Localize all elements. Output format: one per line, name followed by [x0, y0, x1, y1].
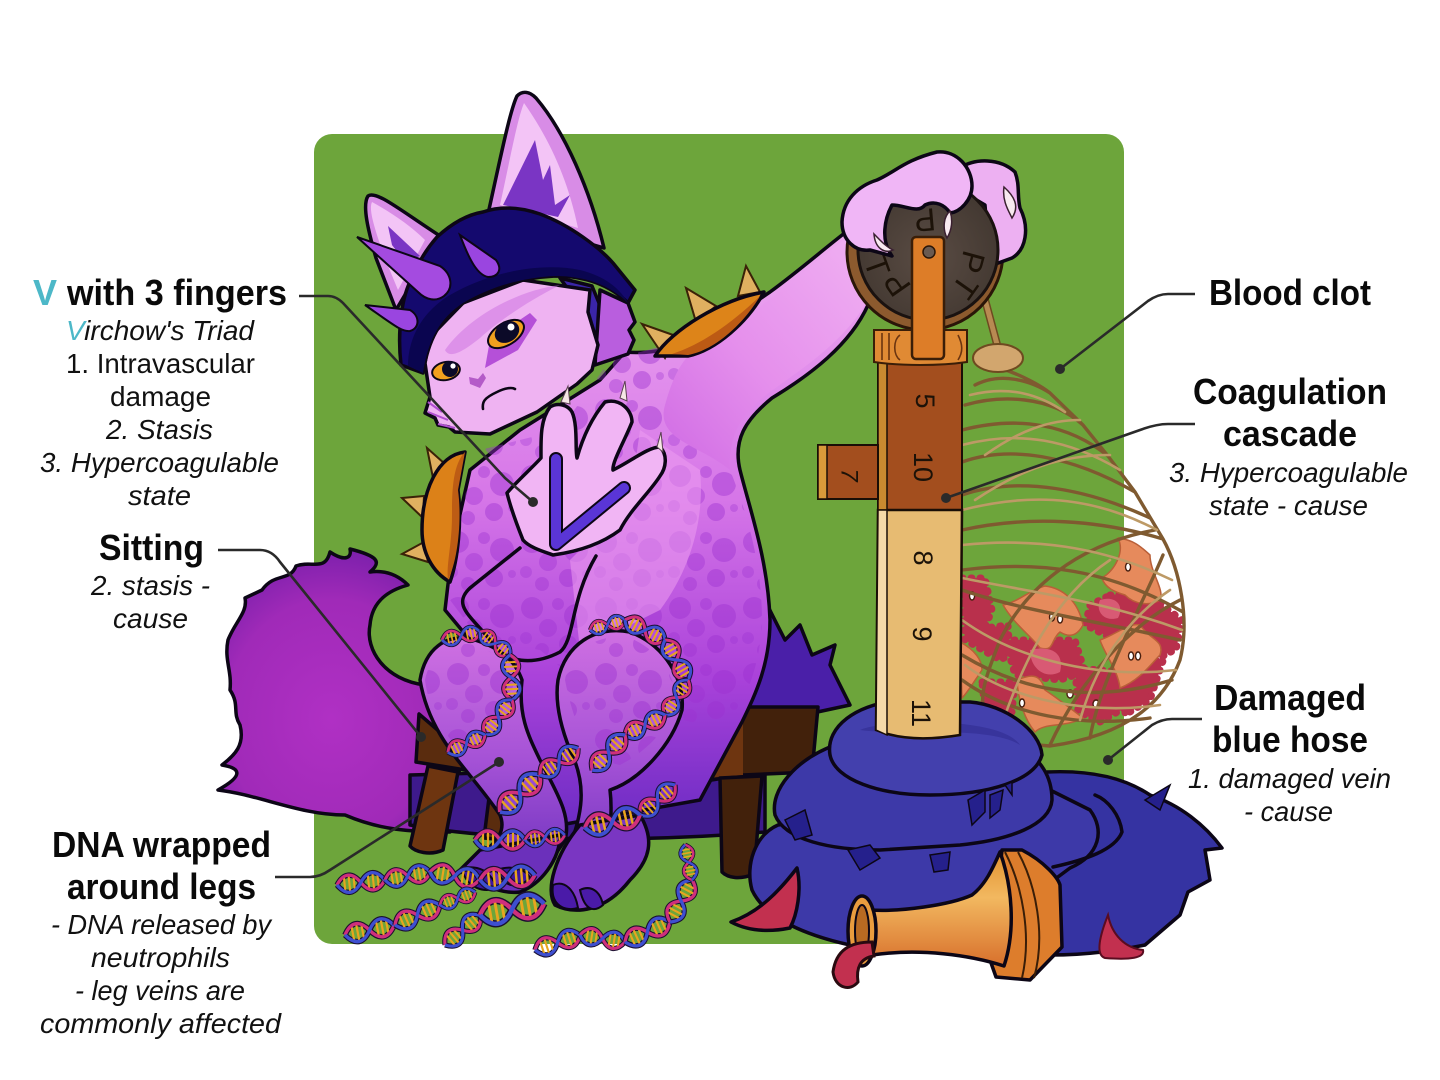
leader line: DNA	[275, 757, 504, 877]
leader line: blood clot	[1055, 294, 1195, 374]
right leg	[557, 631, 682, 886]
hose middle coil	[774, 745, 1052, 850]
heading V: V	[33, 272, 57, 313]
bell flange	[990, 850, 1062, 980]
shoulder pad	[642, 266, 764, 358]
red clot bottom left	[982, 682, 1015, 712]
net string	[984, 296, 998, 348]
label: Sitting	[90, 527, 210, 634]
shield plate	[422, 452, 465, 582]
letter T right: T	[945, 269, 985, 305]
spike lower	[365, 305, 418, 331]
note line 1: 2. stasis -	[90, 570, 210, 601]
shield spikes	[402, 448, 445, 562]
plunger handle	[912, 237, 944, 359]
note 1: - DNA released by	[51, 909, 273, 940]
net knot	[973, 344, 1023, 372]
hair behind face	[560, 278, 606, 372]
label: Coagulation cascade	[1169, 371, 1408, 521]
plunger bell	[731, 850, 1143, 987]
stem body	[878, 360, 962, 510]
net light strands	[962, 391, 1182, 730]
note 2 continued: commonly affected	[40, 1008, 282, 1039]
platelet eyes	[970, 563, 1141, 708]
left ear	[366, 195, 440, 310]
pupil left	[442, 361, 458, 377]
net string light	[984, 296, 998, 348]
left foot toes	[462, 867, 530, 890]
heading rest: with 3 fingers	[66, 272, 287, 313]
flange ridges	[1005, 852, 1039, 978]
helmet spikes	[357, 235, 499, 331]
blue hose	[750, 702, 1222, 955]
platelet star 5	[960, 642, 982, 698]
pulley disc	[858, 180, 998, 320]
blood drip	[833, 942, 874, 987]
label: Blood clot: Blood clot	[1209, 272, 1371, 313]
chest line	[463, 548, 596, 661]
spike large	[357, 237, 450, 299]
letter T left: T	[857, 251, 897, 281]
hose inner ring	[860, 722, 1020, 745]
red blood pool left	[731, 868, 799, 930]
left foot	[460, 835, 560, 892]
right foot	[551, 815, 649, 910]
letter P top: P	[913, 201, 937, 239]
platelet star 4	[1017, 676, 1083, 732]
face spots	[445, 285, 560, 354]
eye glint left	[450, 363, 456, 369]
right ear fur	[503, 140, 570, 217]
hose top coil	[830, 702, 1042, 795]
ring around pulley	[847, 174, 1003, 330]
leader line: coagulation cascade	[941, 424, 1195, 503]
leg spots	[425, 637, 676, 765]
eye iris left	[430, 359, 462, 383]
pulley letters	[857, 201, 992, 305]
item 2: 2. Stasis	[105, 414, 213, 445]
fur tufts on left cheek	[428, 402, 455, 428]
stem tan	[876, 510, 962, 738]
left shield	[402, 448, 465, 582]
mouth	[483, 388, 515, 409]
red clot lower	[1075, 668, 1130, 722]
raised hand with V	[507, 381, 665, 555]
bell cone	[870, 852, 1011, 966]
red clot low right	[1125, 655, 1165, 715]
stool right seat	[555, 707, 818, 790]
bell rim	[848, 896, 876, 966]
note line 1: 1. damaged vein	[1188, 763, 1391, 794]
platelet star 3	[1100, 625, 1161, 688]
red blood pool right	[1099, 915, 1143, 959]
handle bolt	[923, 246, 935, 258]
number 8: 8	[908, 550, 938, 566]
note 1 continued: neutrophils	[91, 942, 230, 973]
torso spots	[450, 320, 762, 730]
face	[425, 280, 598, 434]
number 9: 9	[907, 626, 937, 642]
stool	[410, 707, 818, 878]
shoulder spikes	[642, 266, 760, 358]
eye shadow right	[485, 313, 537, 368]
neck fur	[595, 290, 635, 365]
note line 2: cause	[113, 603, 188, 634]
paw right blob	[960, 161, 1026, 266]
stool left block	[416, 714, 500, 790]
hose tears	[785, 782, 1170, 872]
rim inner	[855, 905, 869, 957]
red clot middle	[1005, 640, 1085, 680]
stub strip	[818, 445, 827, 499]
number 11: 11	[906, 699, 936, 727]
stub with number 7	[818, 445, 878, 499]
left eye	[430, 359, 462, 383]
hose coil divider	[1053, 795, 1122, 867]
Virchow's Triad: Virchow's Triad	[66, 315, 255, 346]
arm light overlay	[664, 238, 865, 470]
left ear fur	[388, 226, 420, 262]
number 5: 5	[910, 393, 940, 409]
cap ridges	[882, 333, 962, 360]
platelet star 1	[1102, 538, 1161, 604]
net dark strands	[962, 365, 1184, 746]
heading line 1: Coagulation	[1193, 371, 1387, 412]
helmet brim shade	[408, 267, 628, 373]
pupil right	[491, 317, 523, 347]
note 2: - leg veins are	[75, 975, 245, 1006]
heading line 1: Damaged	[1214, 677, 1366, 718]
item 3 continued: state	[128, 480, 191, 511]
helmet shell	[400, 208, 635, 373]
leader line: sitting	[218, 550, 426, 742]
label: DNA wrapped around legs	[40, 824, 282, 1039]
note line 1: 3. Hypercoagulable	[1169, 457, 1408, 488]
hose right tail end	[1000, 772, 1222, 955]
label: Damaged blue hose	[1188, 677, 1391, 827]
heading line 1: DNA wrapped	[52, 824, 271, 865]
net holding blood clot	[960, 296, 1184, 746]
cat torso and raised arm	[445, 232, 868, 825]
heading line 2: blue hose	[1212, 719, 1368, 760]
dna strands	[336, 613, 700, 958]
right ear inner	[500, 103, 578, 228]
green background panel	[314, 134, 1124, 944]
note line 2: - cause	[1244, 796, 1333, 827]
paw front	[842, 152, 972, 256]
right foot toes	[553, 884, 603, 909]
stool left leg	[410, 766, 458, 853]
shoulder plate shade	[672, 296, 760, 355]
V mark outline	[556, 459, 624, 544]
clot highlight	[1030, 599, 1120, 675]
left leg	[420, 638, 567, 881]
stem cap	[874, 330, 967, 365]
hand shape	[507, 401, 665, 555]
hose lower coil	[750, 790, 1098, 945]
illustration: cat	[218, 92, 868, 910]
right eye	[483, 313, 537, 368]
clot cluster	[960, 538, 1182, 732]
letter P left: P	[876, 265, 918, 303]
stool right leg	[720, 776, 762, 878]
plunger stem ruler	[818, 152, 1026, 738]
number 10: 10	[908, 452, 938, 482]
leader line: V with 3 fingers	[299, 296, 538, 507]
helmet	[357, 208, 635, 373]
left ear outer	[366, 195, 440, 310]
note line 2: state - cause	[1209, 490, 1368, 521]
item 3: 3. Hypercoagulable	[40, 447, 279, 478]
leader line: damaged hose	[1103, 719, 1202, 765]
spike middle	[460, 235, 499, 277]
stub	[818, 445, 878, 499]
finger claws	[561, 381, 663, 452]
belly highlight	[570, 430, 701, 650]
letter P right: P	[952, 247, 992, 277]
item 1: 1. Intravascular	[66, 348, 255, 379]
eye iris right	[483, 314, 529, 354]
V mark	[556, 459, 624, 544]
label: V with 3 fingers	[33, 272, 287, 511]
heading line 2: cascade	[1223, 413, 1357, 454]
paw claws	[874, 187, 1016, 251]
platelet star 2	[1003, 586, 1083, 649]
stool middle leg	[484, 790, 515, 840]
red clot left	[962, 578, 1010, 660]
heading line 2: around legs	[67, 866, 256, 907]
right ear outer	[488, 92, 604, 248]
red clot right	[1085, 592, 1182, 660]
heading: Sitting	[99, 527, 204, 568]
under-body shadow	[410, 765, 765, 839]
eye glint right	[508, 324, 514, 330]
right ear	[488, 92, 604, 248]
left ear inner	[371, 202, 425, 290]
stem strip top	[878, 360, 887, 510]
stem strip bottom	[876, 510, 887, 735]
item 1 continued: damage	[110, 381, 211, 412]
nose	[469, 373, 486, 388]
stool seat highlight	[703, 708, 743, 778]
right tail fur	[745, 600, 850, 720]
cat tail	[218, 549, 470, 832]
number 7: 7	[836, 468, 862, 483]
shoulder plate	[655, 292, 764, 356]
shield shade	[448, 452, 465, 580]
